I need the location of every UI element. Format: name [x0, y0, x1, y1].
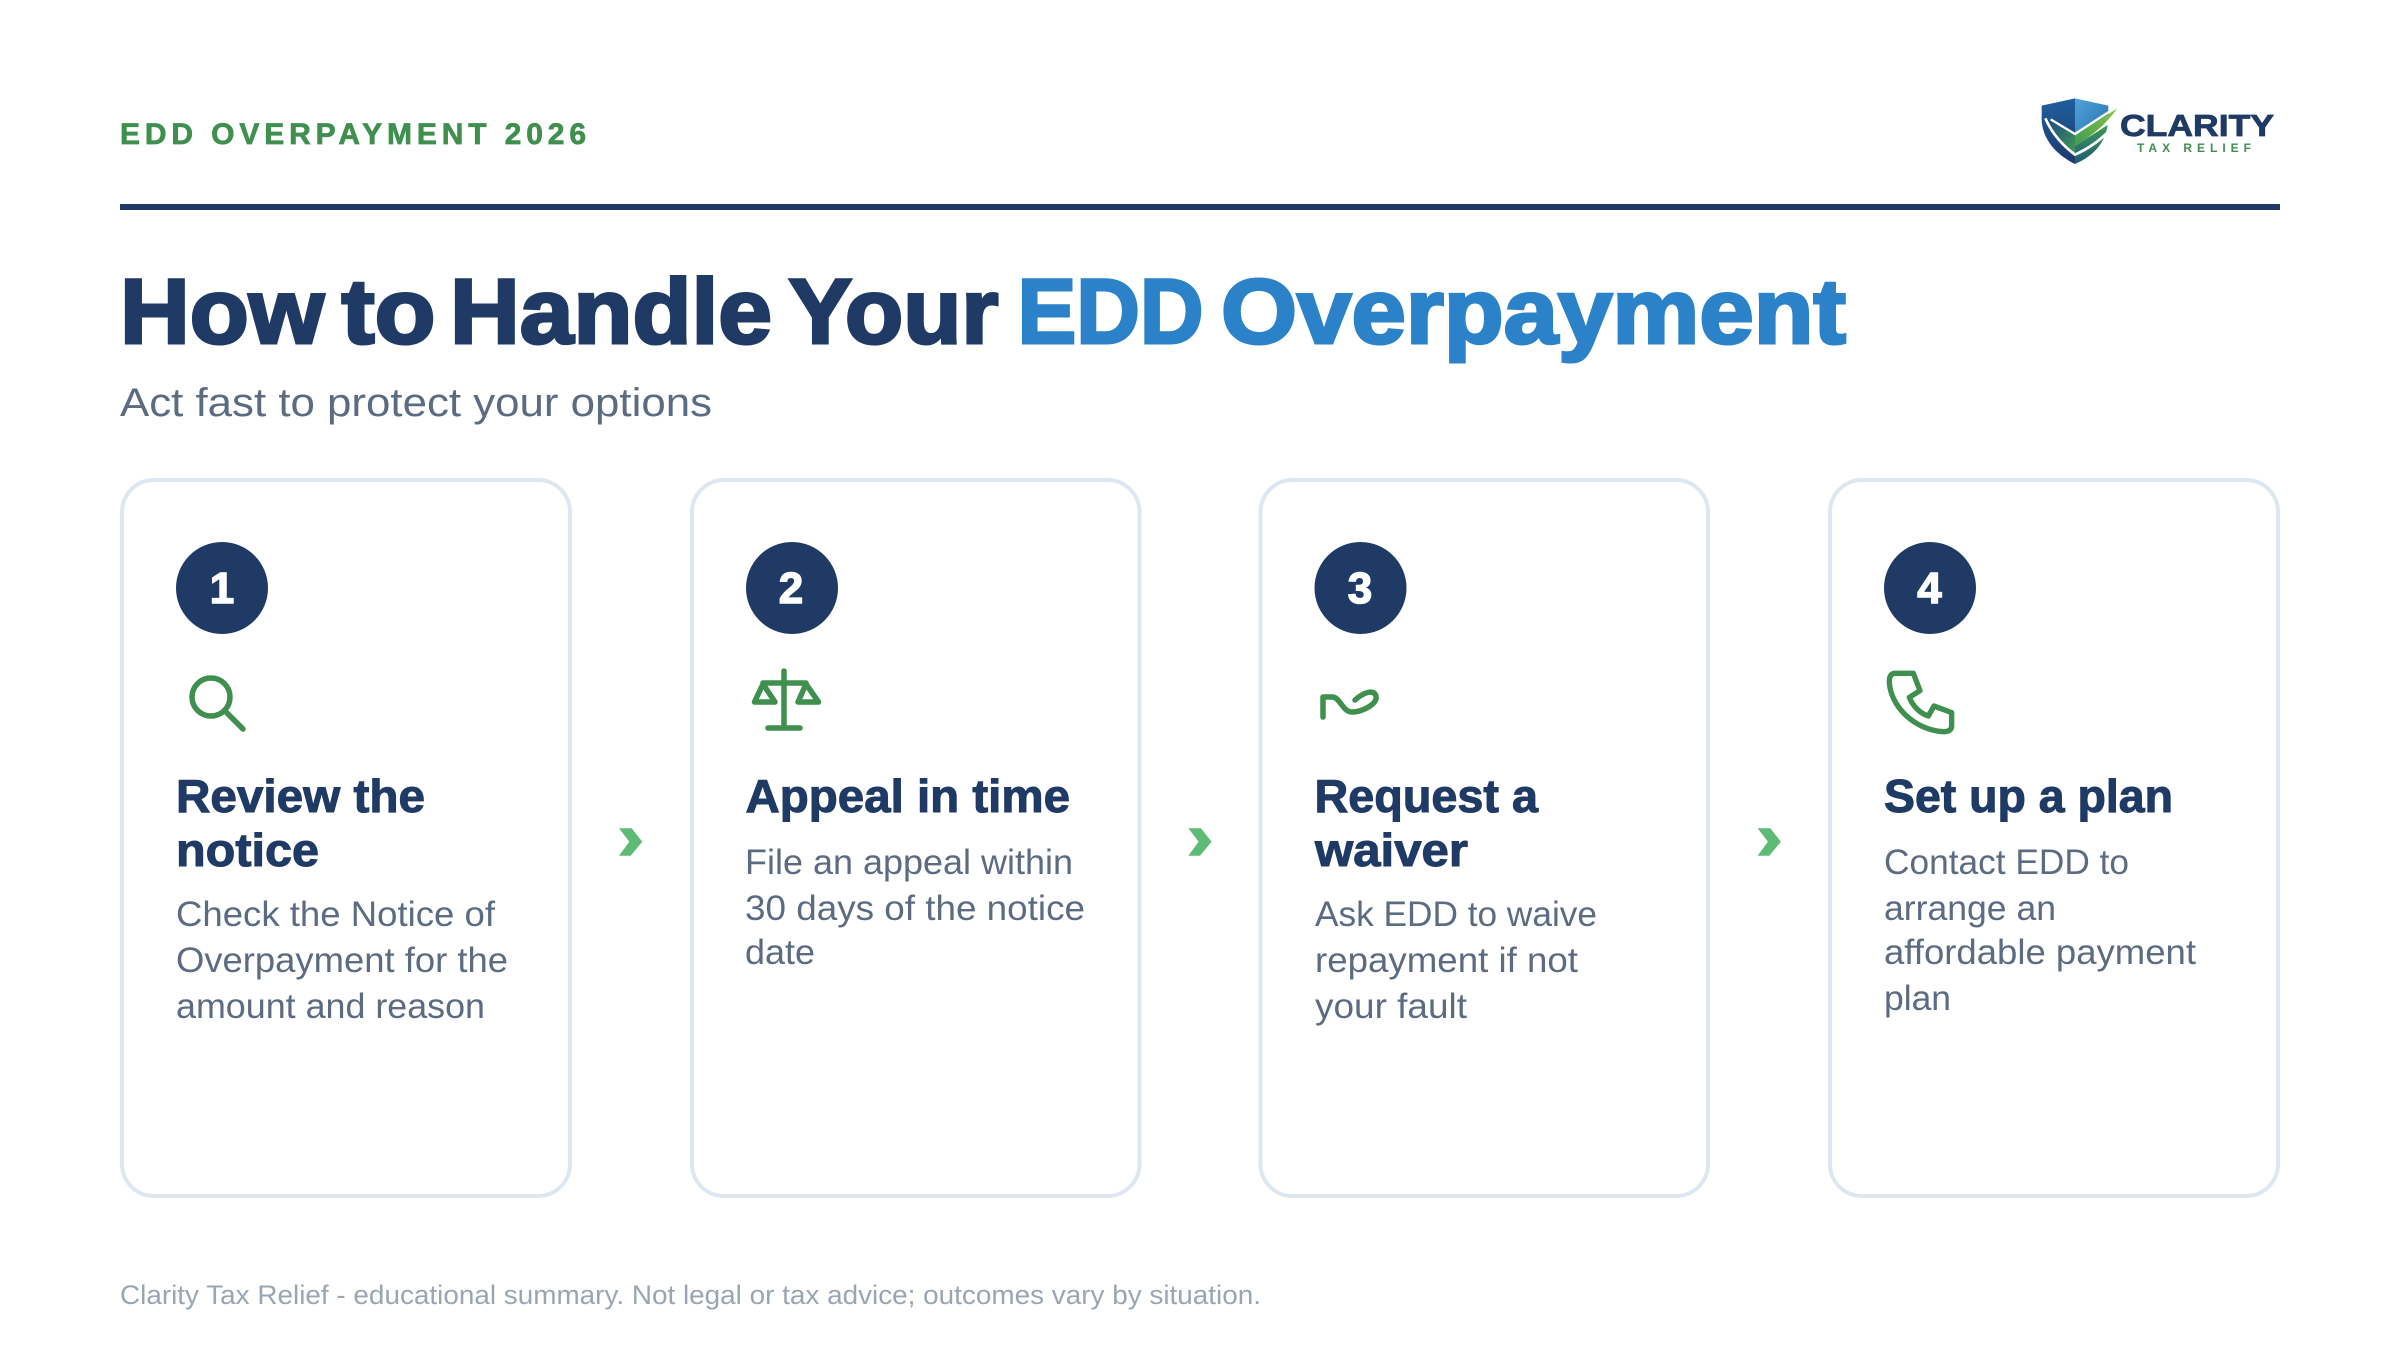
logo: Clarity Tax Relief — [2042, 98, 2274, 164]
title: Handle — [450, 261, 772, 363]
panel: step 1 — [122, 480, 570, 1196]
step 3 heading — [1314, 770, 1538, 876]
title: EDD — [1018, 261, 1204, 363]
step number 1 — [176, 542, 268, 634]
step 3 description: your fault — [1315, 987, 1467, 1026]
panel: step 2 — [692, 480, 1140, 1196]
arrow 2 — [1188, 828, 1212, 856]
panel: step 4 — [1830, 480, 2278, 1196]
step 4 description: plan — [1884, 979, 1951, 1018]
step 1 description: amount and reason — [176, 987, 485, 1026]
step 2 description: date — [745, 933, 815, 972]
step 1 heading — [176, 770, 425, 876]
step 1 description — [176, 895, 508, 1026]
step 4 description: Contact EDD to — [1884, 843, 2129, 882]
step number 3: 3 — [1348, 564, 1372, 613]
step 2 description: 30 days of the notice — [745, 889, 1085, 928]
step 4 heading: Set up a plan — [1884, 770, 2173, 822]
footer disclaimer: Clarity Tax Relief - educational summary. Not legal or tax advice; outcomes vary by situation. — [120, 1280, 1261, 1310]
panel: step 3 — [1260, 480, 1708, 1196]
step 3 description — [1315, 895, 1597, 1026]
icon: shield with check — [2042, 98, 2117, 164]
subtitle: Act fast to protect your options — [120, 381, 712, 425]
step number 1: 1 — [210, 564, 234, 613]
logo wordmark: CLARITY — [2120, 108, 2274, 143]
header rule — [120, 204, 2280, 210]
step 4 description: arrange an — [1884, 889, 2056, 928]
icon: magnifier — [192, 678, 243, 729]
step number 4: 4 — [1917, 564, 1942, 613]
arrow 3 — [1758, 828, 1781, 856]
step 4 description: affordable payment — [1884, 933, 2196, 972]
title — [120, 261, 1846, 363]
step 1 description: Overpayment for the — [176, 941, 508, 980]
step 1 description: Check the Notice of — [176, 895, 495, 934]
step number 4 — [1884, 542, 1976, 634]
step 1 heading: notice — [176, 824, 319, 876]
step 3 description: Ask EDD to waive — [1315, 895, 1597, 934]
eyebrow label: EDD OVERPAYMENT 2026 — [120, 118, 586, 151]
step 3 heading: waiver — [1314, 824, 1468, 876]
step 3 description: repayment if not — [1315, 941, 1578, 980]
step 2 heading: Appeal in time — [746, 770, 1070, 822]
arrow 1 — [619, 828, 642, 856]
step 4 description — [1884, 843, 2196, 1018]
step number 2: 2 — [779, 564, 803, 613]
logo tagline: TAX RELIEF — [2137, 141, 2251, 155]
step number 3 — [1314, 542, 1406, 634]
title: to — [342, 261, 436, 363]
step 2 description: File an appeal within — [745, 843, 1073, 882]
title: Your — [788, 261, 998, 363]
step 2 description — [745, 843, 1085, 972]
step 1 heading: Review the — [176, 770, 425, 822]
icon: phone — [1889, 673, 1952, 732]
title: How — [120, 261, 324, 363]
step number 2 — [746, 542, 838, 634]
title: Overpayment — [1221, 261, 1846, 363]
step 3 heading: Request a — [1314, 770, 1538, 822]
icon: scales — [754, 671, 818, 728]
icon: handshake wave — [1323, 692, 1376, 717]
